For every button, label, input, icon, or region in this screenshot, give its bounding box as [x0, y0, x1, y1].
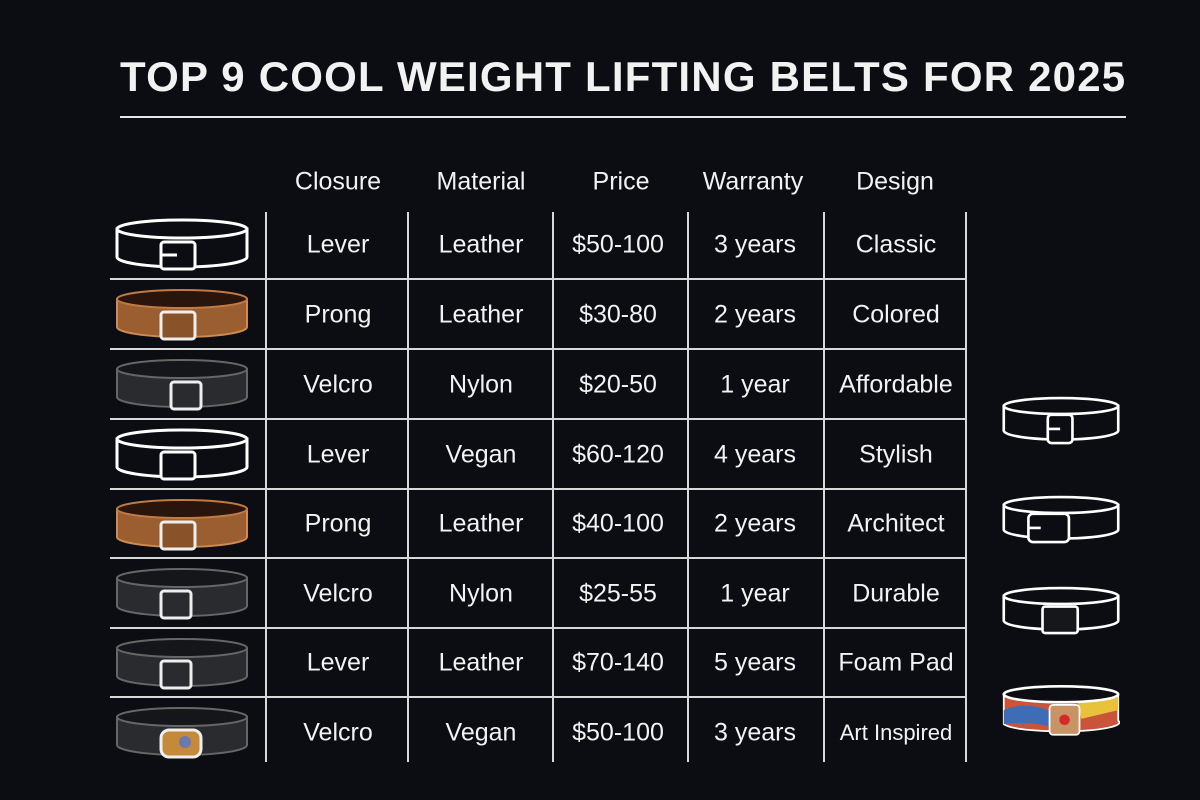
- table: $70-140: [572, 648, 664, 676]
- table: Affordable: [839, 370, 953, 398]
- table: Lever: [307, 440, 369, 468]
- table: Foam Pad: [838, 648, 954, 676]
- table: Durable: [852, 580, 940, 608]
- title: TOP 9 COOL WEIGHT LIFTING BELTS FOR 2025: [120, 53, 1126, 100]
- table: 5 years: [714, 648, 796, 676]
- table: Warranty: [703, 168, 803, 196]
- table: Price: [593, 168, 649, 196]
- table: Leather: [439, 510, 523, 538]
- table: Design: [856, 168, 934, 196]
- table: 2 years: [714, 300, 796, 328]
- table: 3 years: [714, 718, 796, 746]
- table: Leather: [439, 300, 523, 328]
- table: Material: [437, 168, 525, 196]
- table: 3 years: [714, 230, 796, 258]
- icons: belts right: [1002, 396, 1120, 736]
- table: Leather: [439, 230, 523, 258]
- table: $60-120: [572, 440, 664, 468]
- table: $50-100: [572, 718, 664, 746]
- table: $30-80: [579, 300, 657, 328]
- table: Velcro: [303, 370, 373, 398]
- table: Classic: [856, 230, 936, 258]
- table: $50-100: [572, 230, 664, 258]
- table: Lever: [307, 230, 369, 258]
- table: $20-50: [579, 370, 657, 398]
- table: Architect: [847, 510, 945, 538]
- column headers: [295, 168, 934, 196]
- table: 4 years: [714, 440, 796, 468]
- table: Prong: [305, 510, 371, 538]
- table: Colored: [852, 300, 940, 328]
- table: Prong: [305, 300, 371, 328]
- table: 2 years: [714, 510, 796, 538]
- table: Stylish: [859, 440, 933, 468]
- table: Velcro: [303, 580, 373, 608]
- table: Lever: [307, 648, 369, 676]
- table: 1 year: [720, 580, 790, 608]
- table: Art Inspired: [840, 720, 952, 745]
- table: $25-55: [579, 580, 657, 608]
- table: Vegan: [446, 718, 516, 746]
- table: Vegan: [446, 440, 516, 468]
- table: Nylon: [449, 580, 513, 608]
- table: Nylon: [449, 370, 513, 398]
- rows: [303, 230, 954, 746]
- table: Closure: [295, 168, 381, 196]
- table: Velcro: [303, 718, 373, 746]
- table: Leather: [439, 648, 523, 676]
- table: $40-100: [572, 510, 664, 538]
- table: 1 year: [720, 370, 790, 398]
- icons: belts left: [116, 218, 248, 758]
